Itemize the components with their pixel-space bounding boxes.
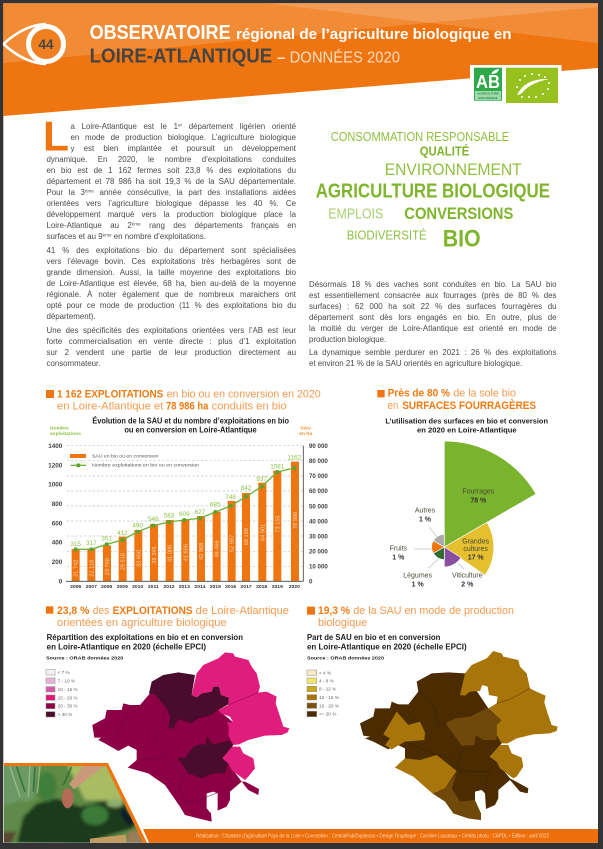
right axis labels: 0 [309,579,313,586]
legend [70,454,199,468]
logos: AB and EU organic: AB [476,72,500,92]
legend right map: 16 - 20 % [319,703,339,708]
bar value labels: 78 986 [293,512,299,529]
intro text column: développement marqué vers la production biologique place la [46,210,296,219]
word cloud: ENVIRONNEMENT [385,160,522,179]
sector labels: Grandes [462,539,490,546]
bar value labels: 64 901 [260,524,266,541]
title: OBSERVATOIRE [90,22,231,44]
intro text column: département). [46,312,96,321]
line value labels: 627 [195,509,206,516]
year labels: 2018 [256,584,267,590]
word cloud [316,130,550,253]
legend left map: > 30 % [58,712,72,717]
title: LOIRE-ATLANTIQUE [90,46,272,68]
bar value labels: 22 118 [89,560,95,577]
line value labels: 490 [132,523,143,530]
map title right: Part de SAU en bio et en conversion [307,633,440,642]
line value labels: 315 [70,541,81,548]
legend left map: 15 - 20 % [58,695,78,700]
sector labels: 1 % [412,582,424,589]
heading: 23,8 % of farms: orientées en agriculture biologique [57,617,227,629]
heading: 23,8 % of farms: 23,8 % [57,605,90,617]
heading: 80 % fodder: en [388,400,398,412]
sector labels: 17 % [468,555,484,562]
bar value labels: 23 768 [105,558,111,575]
legend right map: 4 - 8 % [319,678,334,683]
heading: 80 % fodder: Près de 80 % [388,388,450,400]
heading: 80 % fodder: de la sole bio [453,388,516,400]
right axis labels: 30 000 [309,533,328,540]
year labels: 2014 [194,584,206,590]
right text column: production biologique. [309,334,386,344]
bar value labels [74,512,299,577]
sector labels [390,489,495,589]
legend left map: 7 - 10 % [58,678,75,683]
map title left: en Loire-Atlantique en 2020 (échelle EPCI) [47,643,206,652]
footer credits: Réalisation : Chambre d'agriculture Pays de la Loire • Conception : CentralFab/Duplessis • Design Graphique : Caroline Lusseaux • Crédits photo : CAPDL • Édition : avril 2022 [196,833,549,840]
legend left map: 10 - 15 % [58,687,78,692]
legend: Nombre exploitations en bio ou en conversion [92,463,199,468]
right text column: et environ 21 % de la SAU orientés en agriculture biologique. [309,359,522,368]
title: DONNÉES 2020 [290,50,400,67]
sector labels: 2 % [461,582,474,589]
legend left map [46,670,78,717]
intro text column: a Loire-Atlantique est le 1er département ligérien orienté [70,122,296,131]
line value labels: 317 [86,540,97,547]
sector labels: 1 % [419,517,432,524]
panel: land use polar chart [377,388,548,589]
left axis labels: 600 [52,520,63,527]
line value labels: 546 [148,516,159,523]
header banner [3,3,598,116]
year labels: 2007 [86,584,97,590]
right text column: est essentiellement consacrée aux fourrages (près de 80 % des [309,290,556,300]
legend: SAU en bio ou en conversion [92,454,159,459]
chart title [385,417,548,435]
heading: 19,3 % of SAU: de la SAU en mode de production [353,605,514,617]
right text column [309,280,556,368]
intro text column: en mode de production biologique. L’agriculture biologique [70,133,296,142]
logos: AB and EU organic: BIOLOGIQUE [478,96,498,100]
line value labels: 937 [256,476,267,483]
bar value labels: 21 742 [74,560,80,577]
intro text column: sur 2 vendent une partie de leur production directement au [46,348,296,357]
heading: 80 % fodder [377,388,536,412]
sector labels: Légumes [403,573,433,580]
year labels: 2017 [240,584,252,590]
left axis labels: 0 [59,579,63,586]
line value labels: 748 [225,494,236,501]
map: share of farms by EPCI [92,652,289,822]
intro text column: surfaces et au 9ème en nombre d’exploitations. [46,232,206,241]
year labels [70,584,300,590]
icon: eye with department number 44: 44 [38,37,54,52]
right axis title: SAU [300,426,311,432]
year labels: 2020 [289,584,300,590]
right axis labels: 80 000 [309,458,328,465]
right text column: département sont dès lors engagés en bio. En outre, plus de [309,312,556,322]
legend right map: 12 - 16 % [319,695,339,700]
bars: SAU [72,462,299,581]
intro text column: dynamique. En 2020, le nombre d’exploitations conduites [46,155,296,164]
intro text column: régionale. À noter également que de nombreux maraichers ont [46,290,296,299]
sector labels: Fruits [390,545,408,552]
line value labels: 685 [210,502,221,509]
heading: 23,8 % of farms: EXPLOITATIONS [113,605,193,617]
drop cap L: L [43,112,69,160]
line value labels: 351 [101,536,112,543]
right axis labels: 60 000 [309,488,328,495]
map: share of SAU by EPCI [360,651,558,820]
legend right map: < 4 % [319,670,331,675]
map title right: Source : ORAB données 2020 [307,656,384,662]
intro text column: 41 % des exploitations bio du département sont spécialisées [46,246,296,255]
heading: 23,8 % of farms [46,605,289,629]
year labels: 2016 [225,584,236,590]
right axis labels: 90 000 [309,443,328,450]
right axis labels [309,443,328,586]
chart title: ou en conversion en Loire-Atlantique [124,426,257,435]
title: – [277,50,285,67]
line value labels: 1081 [270,464,285,471]
bar value labels: 58 158 [244,528,250,545]
heading: 1 162 exploitations: conduits en bio [212,400,287,412]
bar value labels: 29 518 [121,553,127,570]
right text column: La dynamique semble perdurer en 2021 : 26 % des exploitations [309,348,556,357]
sector labels: Viticulture [452,573,483,580]
line value labels: 609 [179,511,190,518]
intro text column: en bio est de 1 162 fermes soit 23,8 % des exploitations du [46,166,296,175]
heading: 19,3 % of SAU [307,605,514,629]
heading: 1 162 exploitations: en Loire-Atlantique et [57,400,163,412]
bar value labels: 41 006 [168,545,174,562]
right text column: la moitié du verger de Loire-Atlantique est orienté en mode de [309,324,556,332]
right axis title: en ha [299,431,312,437]
legend left map: 20 - 30 % [58,704,78,709]
intro text column: vers l’élevage bovin. Ces exploitations très herbagères sont de [46,257,296,266]
intro text column: département et 78 986 ha soit 19,3 % de la SAU départementale. [46,177,296,186]
left axis labels: 1200 [48,462,63,469]
intro text column: Pour la 3ème année consécutive, la part des installations aidées [46,188,296,197]
map title left [46,633,243,662]
intro text column: opté pour ce mode de production (11 % des exploitations bio du [46,301,296,310]
word cloud: CONVERSIONS [404,205,513,223]
year labels: 2012 [163,584,175,590]
line: number of farms [74,466,296,551]
logos: AB and EU organic: AGRICULTURE [477,92,499,96]
title: régional de l’agriculture biologique en [236,27,512,43]
legend right map: 8 - 12 % [319,687,336,692]
heading: 1 162 exploitations: en bio ou en conversion en 2020 [167,388,321,400]
map title right: en Loire-Atlantique en 2020 (échelle EPCI) [307,643,467,652]
intro text column: Une des spécificités des exploitations orientées vers l’AB est leur [46,326,296,335]
bar value labels: 73 155 [275,515,281,533]
title [90,22,511,68]
right axis labels: 70 000 [309,473,328,480]
year labels: 2008 [101,584,112,590]
intro text column: consommateur. [46,359,100,368]
heading: 19,3 % of SAU: biologique [318,617,367,629]
word cloud: QUALITÉ [420,144,469,159]
left axis labels: 1000 [48,482,63,489]
icon: eye with department number 44 [4,24,64,64]
right text column: surfaces) : 62 000 ha soit 22 % des surfaces fourragères du [309,302,556,310]
map title right [307,633,467,662]
intro text column: y est bien implantée et poursuit un développement [70,144,296,153]
sector labels: cultures [463,546,488,553]
line value labels: 842 [241,485,252,492]
word cloud: BIO [443,226,481,253]
photo frame and footer bar [4,763,598,843]
heading: 23,8 % of farms: de Loire-Atlantique [196,605,289,617]
intro text column [46,122,296,368]
word cloud: AGRICULTURE BIOLOGIQUE [316,180,550,202]
heading: 23,8 % of farms: des [93,605,110,617]
year labels: 2011 [148,584,159,590]
sector labels: Fourrages [462,489,495,496]
right axis title [299,426,312,437]
year labels: 2015 [210,584,221,590]
right text column: Désormais 18 % des vaches sont conduites en bio. La SAU bio [309,280,556,288]
year labels: 2006 [70,584,81,590]
right axis labels: 50 000 [309,503,328,510]
chart title: L’utilisation des surfaces en bio et conversion [385,417,548,426]
heading: 19,3 % of SAU: 19,3 % [318,605,350,617]
legend left map: < 7 % [58,670,70,675]
word cloud: BIODIVERSITÉ [347,227,427,242]
year labels: 2010 [132,584,143,590]
polar area sectors [432,441,536,575]
word cloud: CONSOMMATION RESPONSABLE [331,130,509,144]
bar value labels: 38 345 [152,546,158,564]
heading: 1 162 exploitations: 78 986 ha [166,400,209,412]
chart title: Évolution de la SAU et du nombre d’exploitations en bio [92,417,289,426]
intro text column: de Loire-Atlantique est élevée, 68 ha, bien au-delà de la moyenne [46,279,296,288]
bar value labels: 41 606 [183,544,189,561]
legend right map [307,670,339,717]
bar value labels: 33 650 [136,550,142,567]
heading: 80 % fodder: SURFACES FOURRAGÈRES [402,399,536,412]
sector labels: 78 % [470,498,487,505]
left axis title: Nombre [50,426,69,432]
bar value labels: 52 987 [230,535,236,552]
axes [66,446,303,581]
chart title: en 2020 en Loire-Atlantique [417,426,517,435]
bar value labels: 42 968 [199,543,205,560]
logos: AB and EU organic [470,65,562,106]
photo: hand in organic crops [4,766,143,843]
left axis labels [48,443,63,586]
intro text column: orientées vers l’agriculture biologique dépasse les 40 %. Ce [46,199,296,208]
bar value labels: 46 466 [215,540,221,558]
intro text column: forte commercialisation en vente directe : plus d’1 exploitation [46,337,296,346]
heading: 1 162 exploitations: 1 162 EXPLOITATIONS [57,388,163,400]
right axis labels: 10 000 [309,564,328,571]
heading: 1 162 exploitations [46,388,321,412]
right axis labels: 40 000 [309,518,328,525]
map title left: Répartition des exploitations en bio et en conversion [47,633,243,642]
left axis labels: 200 [52,559,63,566]
year labels: 2009 [117,584,128,590]
left axis labels: 1400 [48,443,63,450]
map title left: Source : ORAB données 2020 [46,656,124,662]
word cloud: EMPLOIS [328,206,383,222]
left axis title: exploitations [50,431,81,437]
line value labels: 1162 [288,455,302,462]
sector labels: Autres [415,508,436,515]
chart title [92,417,289,435]
left axis labels: 400 [52,540,63,547]
sector labels: 1 % [392,554,405,561]
leader lines [414,527,464,569]
left axis labels: 800 [52,501,63,508]
intro text column: Loire-Atlantique au 2ème rang des départements français en [46,221,296,230]
legend right map: >= 20 % [319,712,336,717]
intro text column: grande dimension. Aussi, la taille moyenne des exploitations bio [46,268,296,277]
left axis title [50,426,81,437]
right axis labels: 20 000 [309,548,328,555]
line value labels [70,455,302,548]
panel: exploitations chart [46,388,328,590]
line value labels: 412 [117,530,128,537]
year labels: 2019 [272,584,283,590]
year labels: 2013 [179,584,190,590]
line value labels: 583 [164,513,175,520]
